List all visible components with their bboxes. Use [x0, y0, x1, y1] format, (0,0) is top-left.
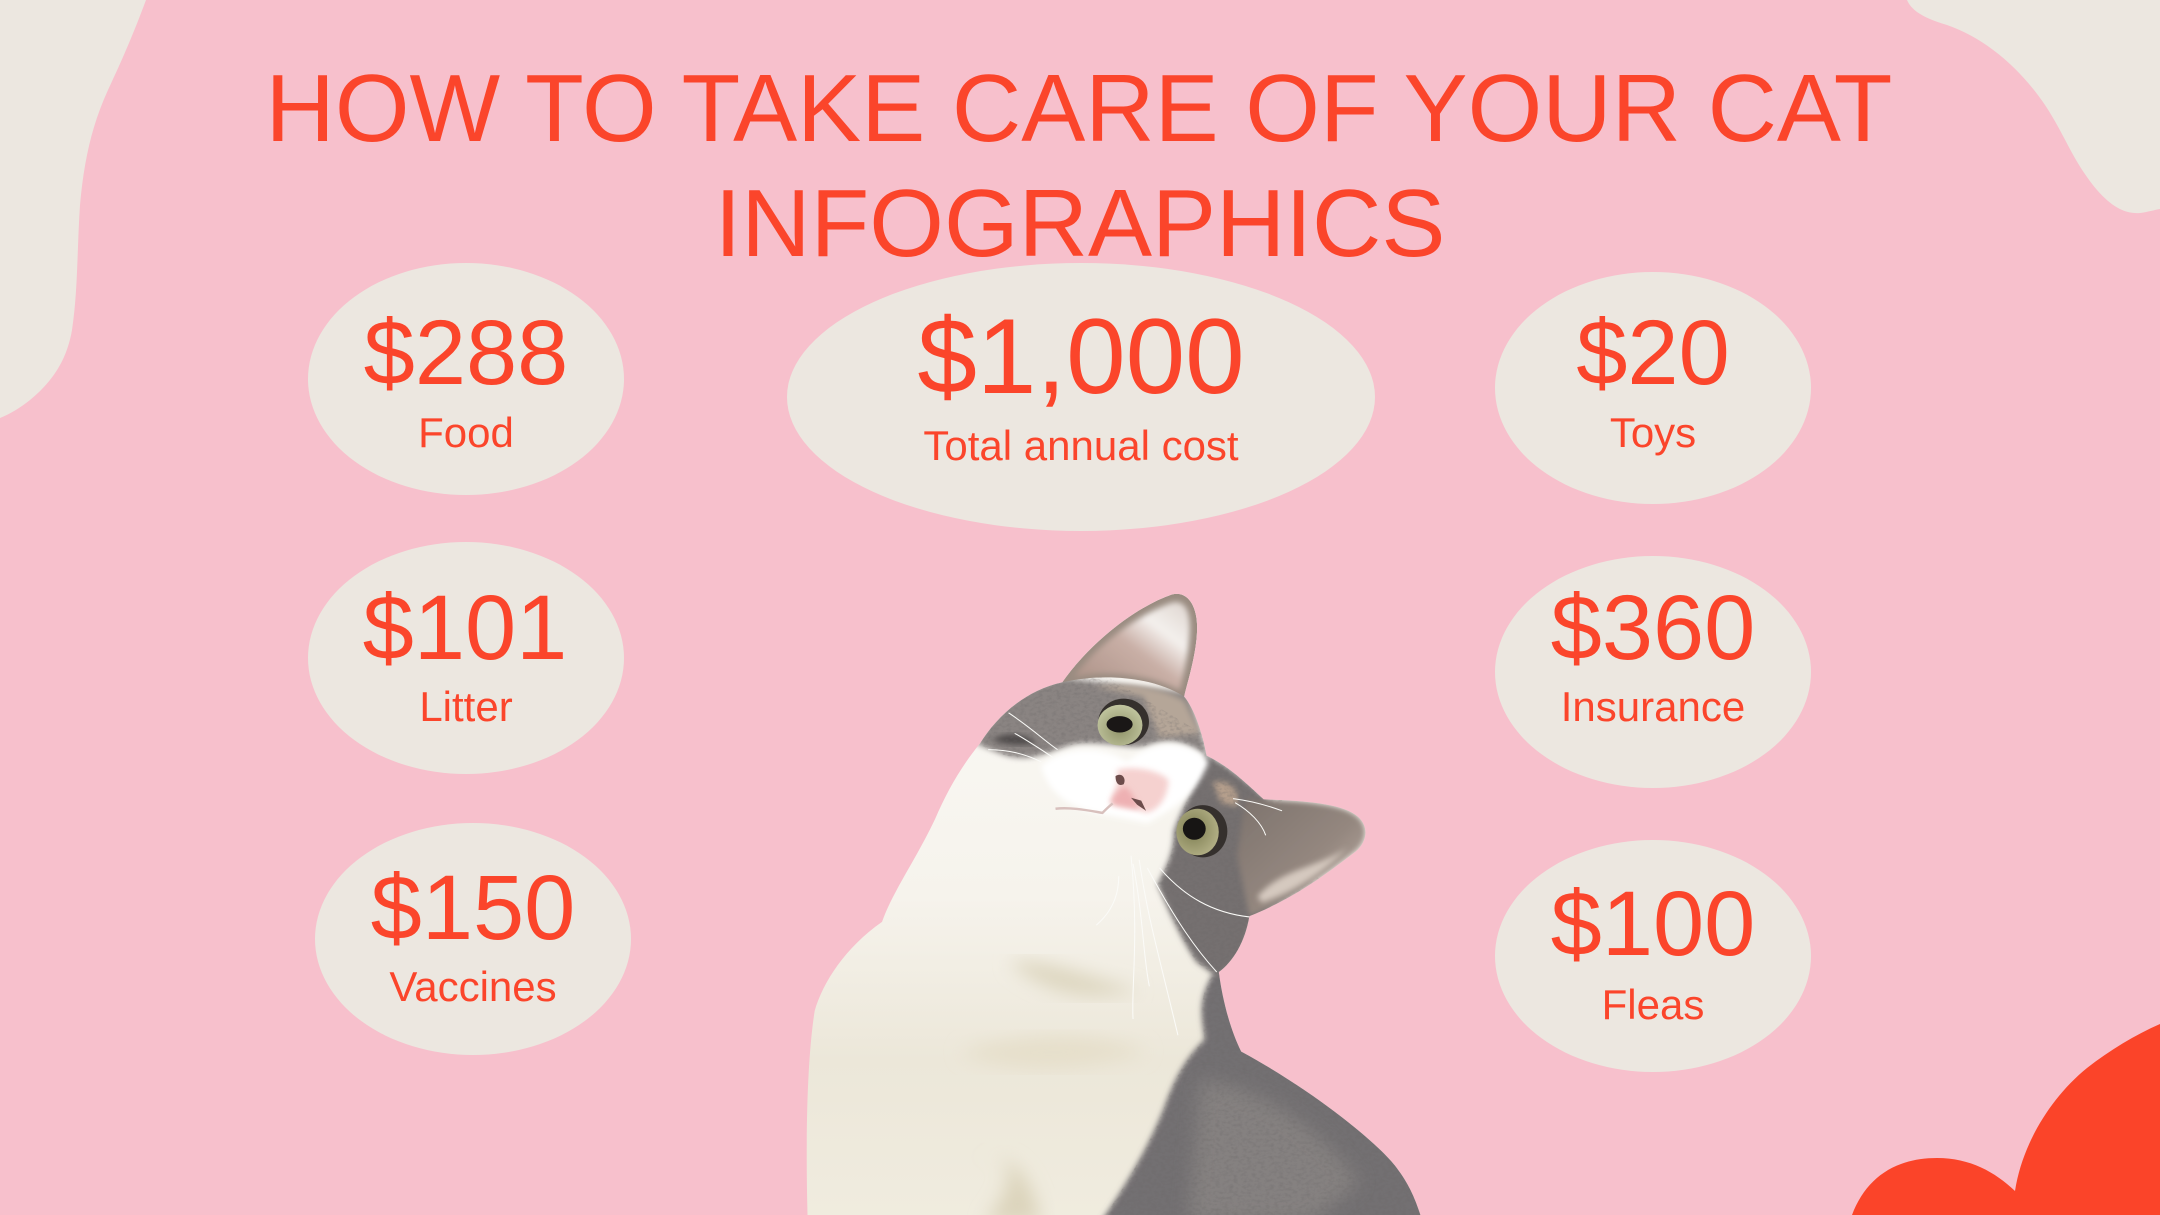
illustration: cat	[806, 594, 1420, 1215]
whiskers	[988, 713, 1282, 1035]
blob: top right	[1907, 0, 2160, 213]
stat: litter: Litter	[419, 683, 513, 730]
stat: insurance	[1495, 556, 1811, 788]
gray forehead	[976, 678, 1209, 758]
stat: toys: Toys	[1610, 409, 1696, 456]
stat: fleas: Fleas	[1602, 981, 1704, 1028]
blob: bottom right	[1852, 1024, 2160, 1215]
ear: left	[1062, 594, 1197, 697]
stat: total annual cost: $1,000	[917, 296, 1245, 416]
stat: total annual cost	[787, 263, 1375, 531]
stat: food	[308, 263, 624, 495]
stat: fleas: $100	[1551, 873, 1755, 975]
stat: vaccines: Vaccines	[389, 963, 557, 1010]
fur texture	[983, 664, 1402, 1207]
stat: vaccines: $150	[371, 857, 575, 959]
stat: insurance: $360	[1551, 577, 1755, 679]
ear: right	[1237, 799, 1365, 916]
title	[266, 55, 1892, 277]
stat: litter: $101	[363, 577, 567, 679]
stat: insurance: Insurance	[1561, 683, 1745, 730]
nose	[1056, 768, 1169, 813]
blob: top left	[0, 0, 146, 418]
title: HOW TO TAKE CARE OF YOUR CAT	[266, 55, 1892, 162]
muzzle	[1041, 745, 1209, 823]
gray body	[1094, 962, 1441, 1215]
stat: food: $288	[364, 302, 568, 404]
stat: toys	[1495, 272, 1811, 504]
stat: vaccines	[315, 823, 631, 1055]
stat: litter	[308, 542, 624, 774]
stat: food: Food	[418, 409, 514, 456]
stat: fleas	[1495, 840, 1811, 1072]
title: INFOGRAPHICS	[715, 170, 1445, 277]
stat: total annual cost: Total annual cost	[923, 422, 1239, 469]
eye: lower	[1176, 805, 1227, 857]
gray right face	[1158, 754, 1311, 978]
eye: upper	[1098, 699, 1149, 746]
stat: toys: $20	[1576, 302, 1730, 404]
